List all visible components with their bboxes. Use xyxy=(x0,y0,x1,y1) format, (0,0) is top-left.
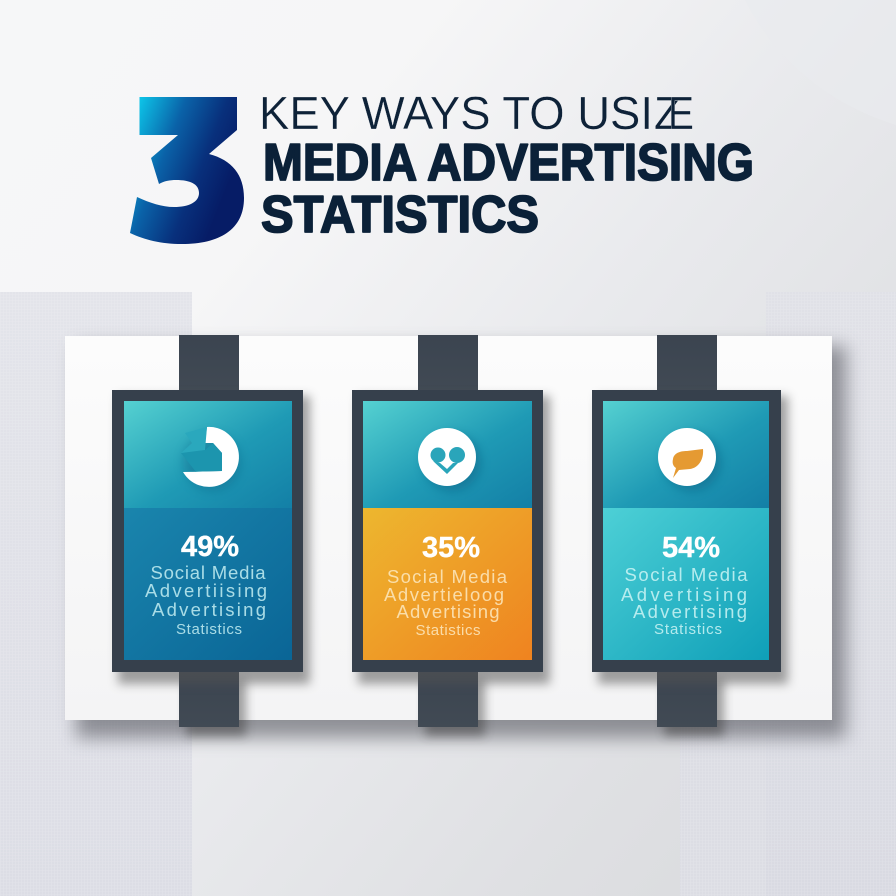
card 3 lower panel xyxy=(603,508,769,660)
card 3 description: Advertising xyxy=(621,584,747,605)
title line 3: STATISTICS xyxy=(261,186,539,244)
card 1 description: Social Media xyxy=(150,562,266,583)
numeral 3 xyxy=(130,97,244,244)
card 3 description: Social Media xyxy=(624,564,748,585)
card 1 xyxy=(112,335,310,736)
card 2 xyxy=(352,335,550,736)
card 2 icon xyxy=(418,428,481,491)
card 2 description: Social Media xyxy=(387,566,508,587)
title line 1: E xyxy=(668,87,694,139)
white board panel xyxy=(65,336,846,738)
title line 1: Z xyxy=(654,87,681,139)
title line 1: KEY WAYS TO USI xyxy=(259,87,653,139)
card 1 description: Statistics xyxy=(176,621,242,638)
card 2 description xyxy=(384,566,508,639)
card 1 percent: 49% xyxy=(181,531,239,563)
card 3 frame xyxy=(592,390,781,672)
card 2 lower panel xyxy=(363,508,532,660)
card 2 upper panel xyxy=(363,401,532,509)
card 3 icon xyxy=(658,428,721,491)
card 2 frame xyxy=(352,390,543,672)
card 3 description: Statistics xyxy=(654,621,722,638)
card 1 description: Advertiising xyxy=(145,580,267,601)
title xyxy=(130,87,754,244)
card 1 upper panel xyxy=(124,401,292,509)
card 2 percent: 35% xyxy=(422,532,480,564)
card 2 description: Statistics xyxy=(416,622,480,639)
card 1 frame xyxy=(112,390,303,672)
title line 2: MEDIA ADVERTISING xyxy=(263,134,754,192)
card 2 straps xyxy=(418,335,478,727)
card 3 description xyxy=(621,564,748,638)
card 1 description xyxy=(145,562,267,638)
card 2 description: Advertieloog xyxy=(384,584,504,605)
card 3 percent: 54% xyxy=(662,532,720,564)
card 1 lower panel xyxy=(124,508,292,660)
card 1 straps xyxy=(179,335,239,727)
card 2 description: Advertising xyxy=(396,601,500,622)
card 3 upper panel xyxy=(603,401,769,509)
card 3 xyxy=(592,335,788,736)
card 1 icon xyxy=(181,427,241,491)
card 3 description: Advertising xyxy=(633,601,747,622)
card 3 straps xyxy=(657,335,717,727)
card 1 description: Advertising xyxy=(152,599,266,620)
